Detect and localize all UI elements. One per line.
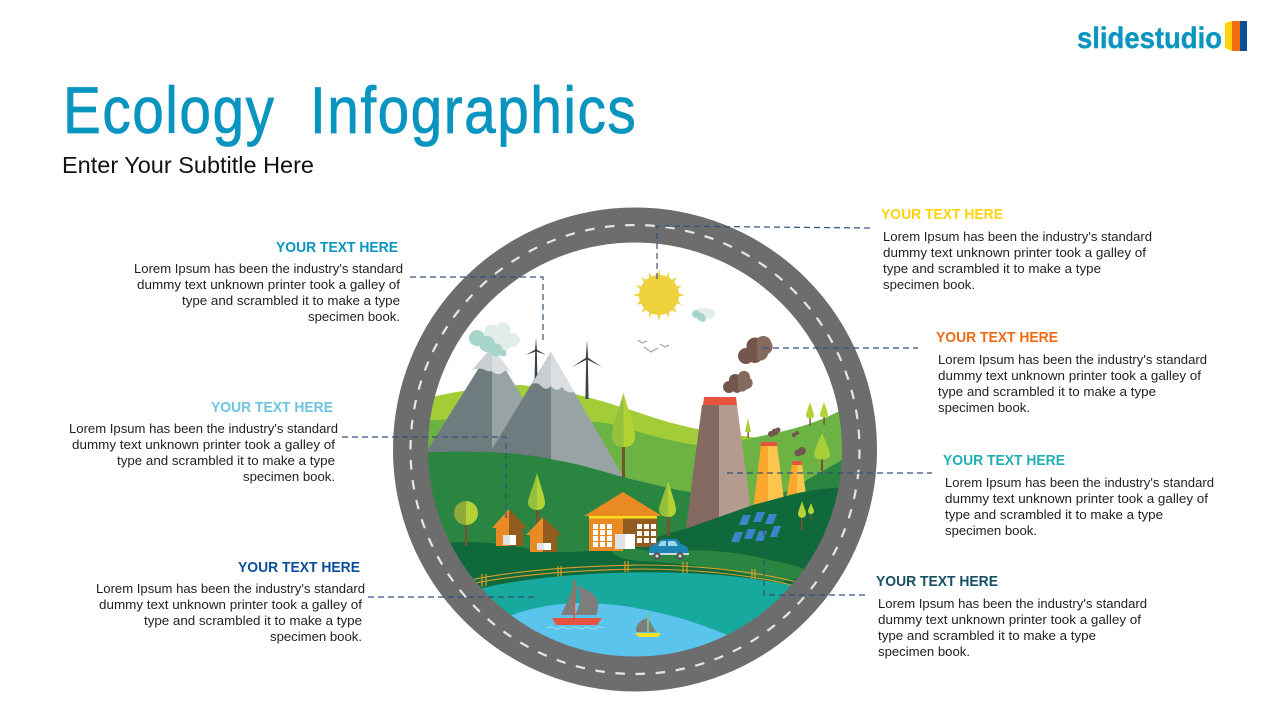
lake inner water: [511, 602, 727, 656]
logo: slidestudio: [1077, 22, 1222, 55]
text block: middle left: type and scrambled it to make a type: [117, 454, 335, 468]
icon: large cooling tower: [686, 397, 751, 528]
icon: mountain cloud: [469, 322, 520, 356]
text block: middle right: Lorem Ipsum has been the industry's standard: [945, 476, 1214, 490]
text block: upper right: [936, 330, 1207, 415]
connector lines: [342, 226, 932, 597]
icon: sun: [633, 269, 685, 321]
icon: large sailboat: [547, 580, 604, 629]
text block: lower right: [876, 574, 1147, 659]
sky: [426, 240, 844, 658]
text block: middle left: YOUR TEXT HERE: [211, 400, 333, 416]
icon: small wind turbine: [526, 338, 546, 382]
text block: middle right: [943, 453, 1214, 538]
text block: top right: YOUR TEXT HERE: [881, 207, 1003, 223]
text block: upper right: dummy text unknown printer took a galley of: [938, 369, 1202, 383]
icon: car: [649, 539, 689, 560]
text block: upper left: specimen book.: [308, 310, 400, 324]
forest ground: [450, 488, 838, 588]
text block: top right: dummy text unknown printer took a galley of: [883, 246, 1147, 260]
left mountain: [428, 352, 523, 452]
text block: upper left: type and scrambled it to make a type: [182, 294, 400, 308]
text block: lower right: specimen book.: [878, 645, 970, 659]
text block: upper left: dummy text unknown printer took a galley of: [137, 278, 401, 292]
text block: lower left: dummy text unknown printer took a galley of: [99, 598, 363, 612]
icon: factory smoke: [768, 428, 806, 456]
text block: top right: type and scrambled it to make a type: [883, 262, 1101, 276]
icon: small sailboat: [635, 614, 661, 637]
icon: large house: [584, 492, 662, 551]
text block: upper right: specimen book.: [938, 401, 1030, 415]
icon: small house one: [492, 509, 527, 546]
right dark green band: [783, 460, 842, 497]
text block: upper left: [134, 240, 403, 324]
road ring: [410, 225, 860, 674]
text block: lower right: type and scrambled it to make a type: [878, 629, 1096, 643]
icons: forest trees: [798, 501, 814, 530]
text block: top right: [881, 207, 1152, 292]
icons: small hill trees: [745, 402, 830, 471]
text block: top right: Lorem Ipsum has been the industry's standard: [883, 230, 1152, 244]
icon: orange cooling tower: [753, 442, 806, 510]
illustration: ecology landscape: [428, 269, 842, 656]
text block: upper right: YOUR TEXT HERE: [936, 330, 1058, 346]
icon: small cloud: [692, 308, 715, 322]
text block: middle right: dummy text unknown printer took a galley of: [945, 492, 1209, 506]
icon: round tree: [454, 501, 478, 546]
icon: birds: [638, 340, 669, 352]
text block: middle left: Lorem Ipsum has been the industry's standard: [69, 422, 338, 436]
text block: middle right: specimen book.: [945, 524, 1037, 538]
text block: lower left: specimen book.: [270, 630, 362, 644]
text block: upper right: type and scrambled it to make a type: [938, 385, 1156, 399]
text block: middle left: dummy text unknown printer took a galley of: [72, 438, 336, 452]
text block: middle right: type and scrambled it to make a type: [945, 508, 1163, 522]
text block: lower left: YOUR TEXT HERE: [238, 560, 360, 576]
text block: middle left: specimen book.: [243, 470, 335, 484]
text block: lower right: dummy text unknown printer took a galley of: [878, 613, 1142, 627]
icon: tall tree: [612, 393, 635, 478]
text block: lower left: type and scrambled it to make a type: [144, 614, 362, 628]
text block: middle right: YOUR TEXT HERE: [943, 453, 1065, 469]
icon: smoke clouds: [723, 336, 773, 393]
icon: tree by house: [659, 481, 676, 536]
icon: large wind turbine: [572, 340, 602, 399]
text block: middle left: [69, 400, 338, 484]
medium ground strip: [612, 548, 815, 582]
fence: [470, 561, 797, 587]
title: Ecology Infographics: [63, 74, 636, 148]
text block: lower left: Lorem Ipsum has been the industry's standard: [96, 582, 365, 596]
text block: lower right: YOUR TEXT HERE: [876, 574, 998, 590]
text block: lower left: [96, 560, 365, 644]
lake: [481, 572, 791, 635]
text block: top right: specimen book.: [883, 278, 975, 292]
icon: small house two: [526, 517, 562, 552]
back hill: [430, 385, 756, 445]
icon: solar panels: [731, 512, 781, 542]
text block: upper left: YOUR TEXT HERE: [276, 240, 398, 256]
text block: lower right: Lorem Ipsum has been the industry's standard: [878, 597, 1147, 611]
middle hill: [428, 412, 842, 506]
text block: upper left: Lorem Ipsum has been the industry's standard: [134, 262, 403, 276]
text block: upper right: Lorem Ipsum has been the industry's standard: [938, 353, 1207, 367]
right mountain: [492, 352, 622, 477]
icon: teardrop tree: [528, 473, 545, 524]
dark green hill: [428, 452, 691, 552]
subtitle: Enter Your Subtitle Here: [62, 152, 314, 178]
